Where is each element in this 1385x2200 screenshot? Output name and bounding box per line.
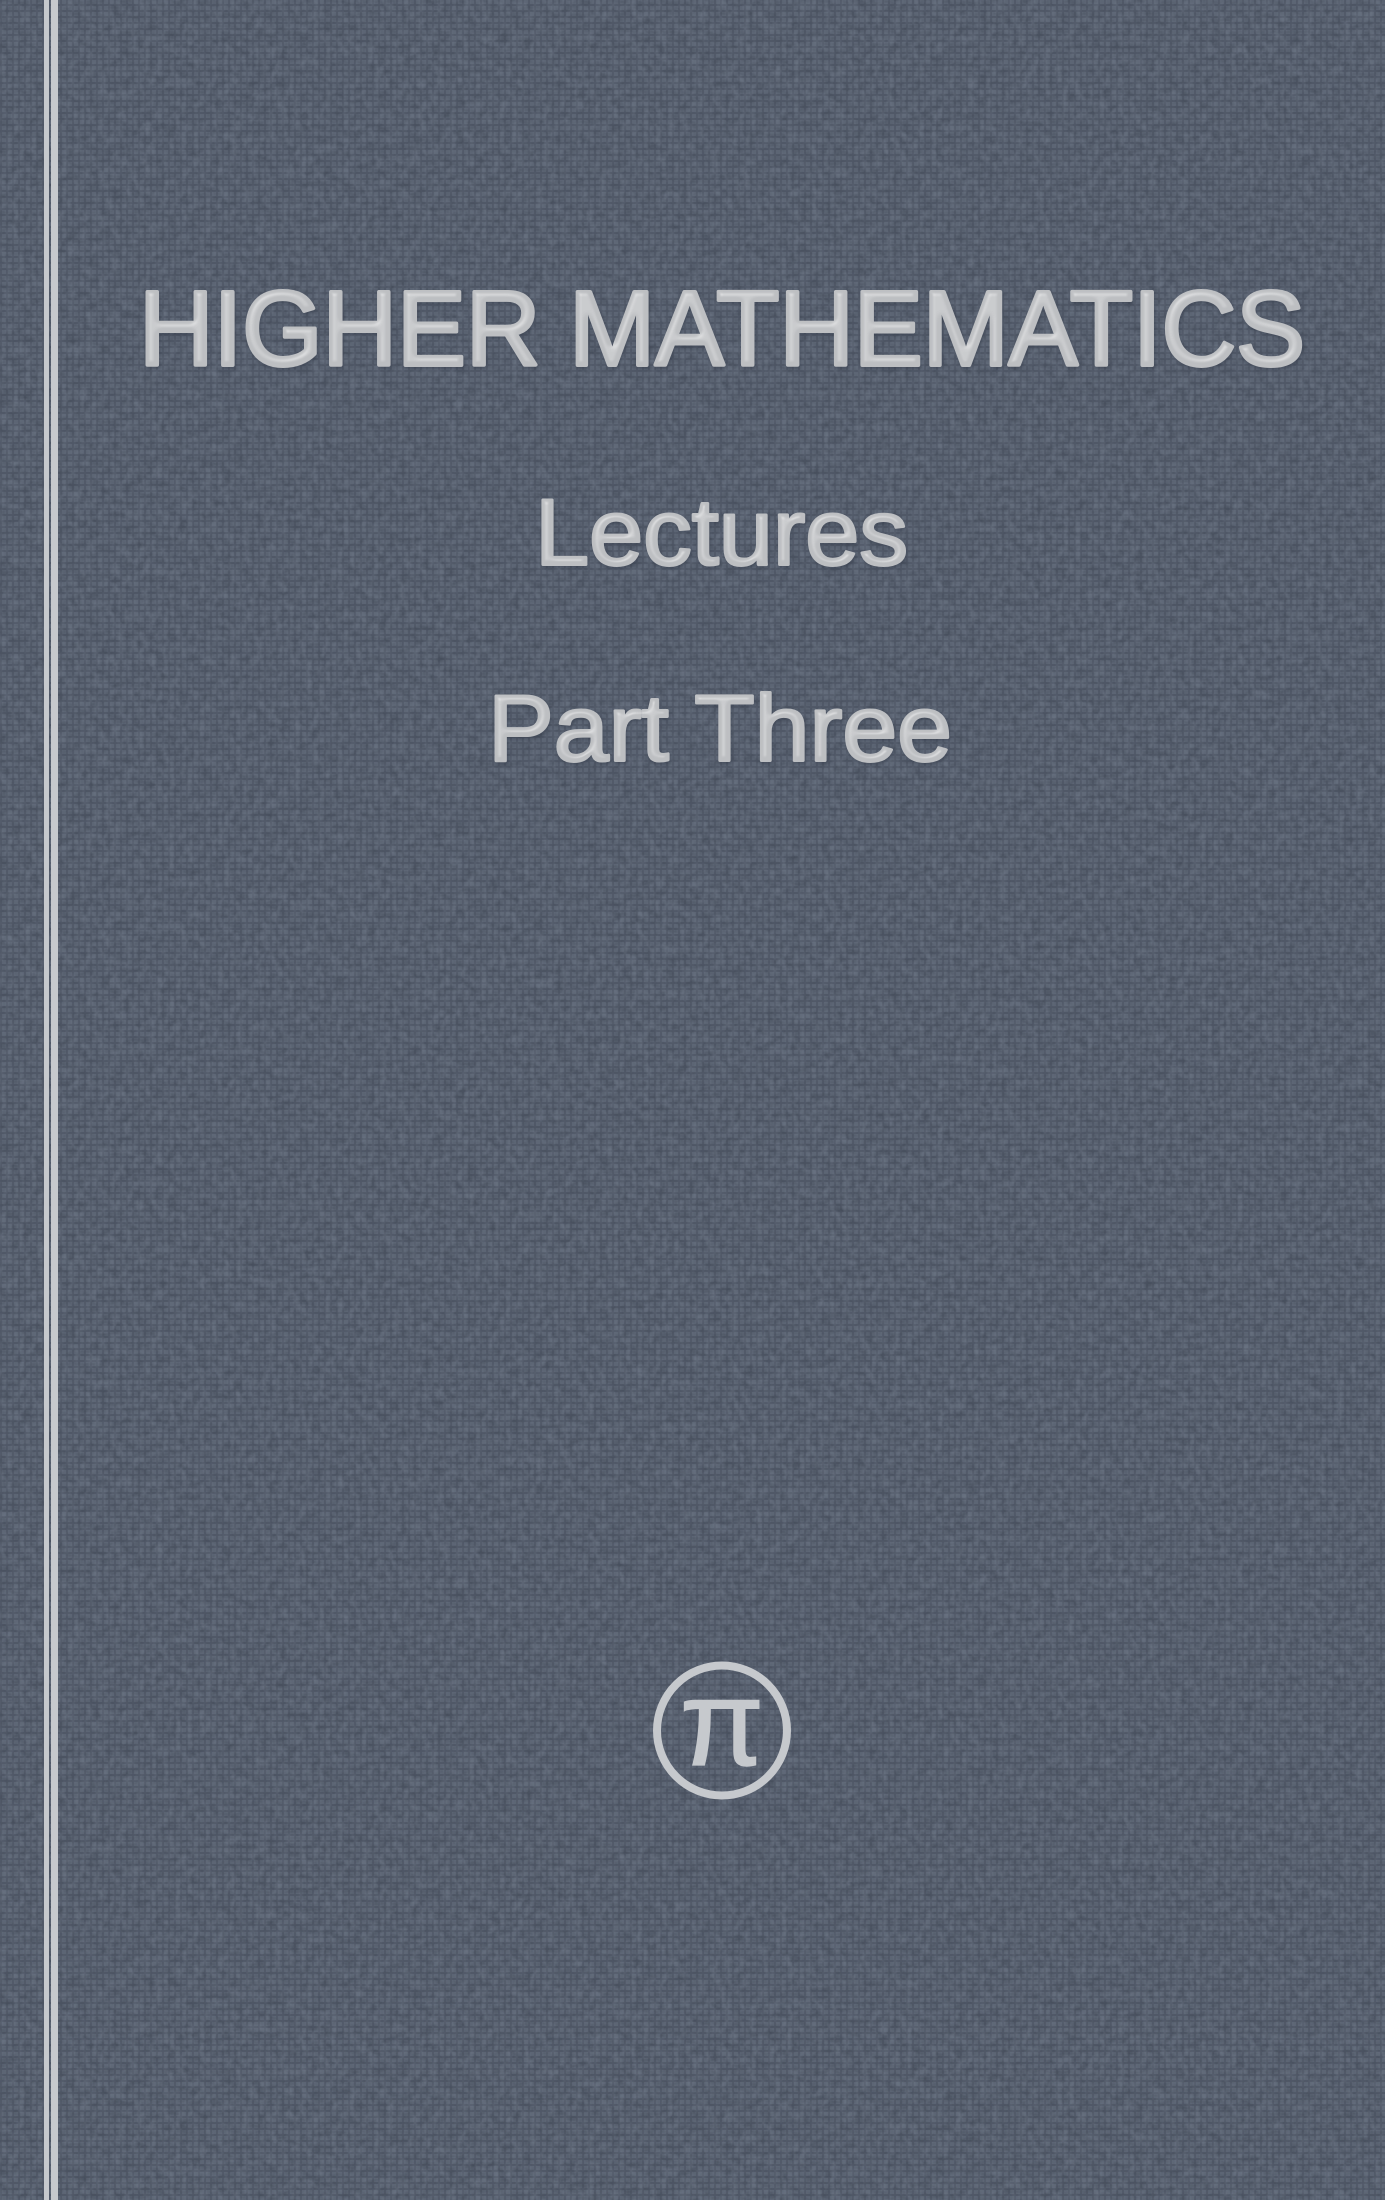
spine lines (44, 0, 58, 2200)
subtitle: Part Three: Part Three (488, 676, 952, 780)
subtitle: Lectures: Lectures (535, 480, 908, 584)
icon: pi logo (657, 1655, 787, 1796)
icon: pi logo: π (680, 1655, 764, 1791)
title: HIGHER MATHEMATICS (139, 270, 1305, 388)
